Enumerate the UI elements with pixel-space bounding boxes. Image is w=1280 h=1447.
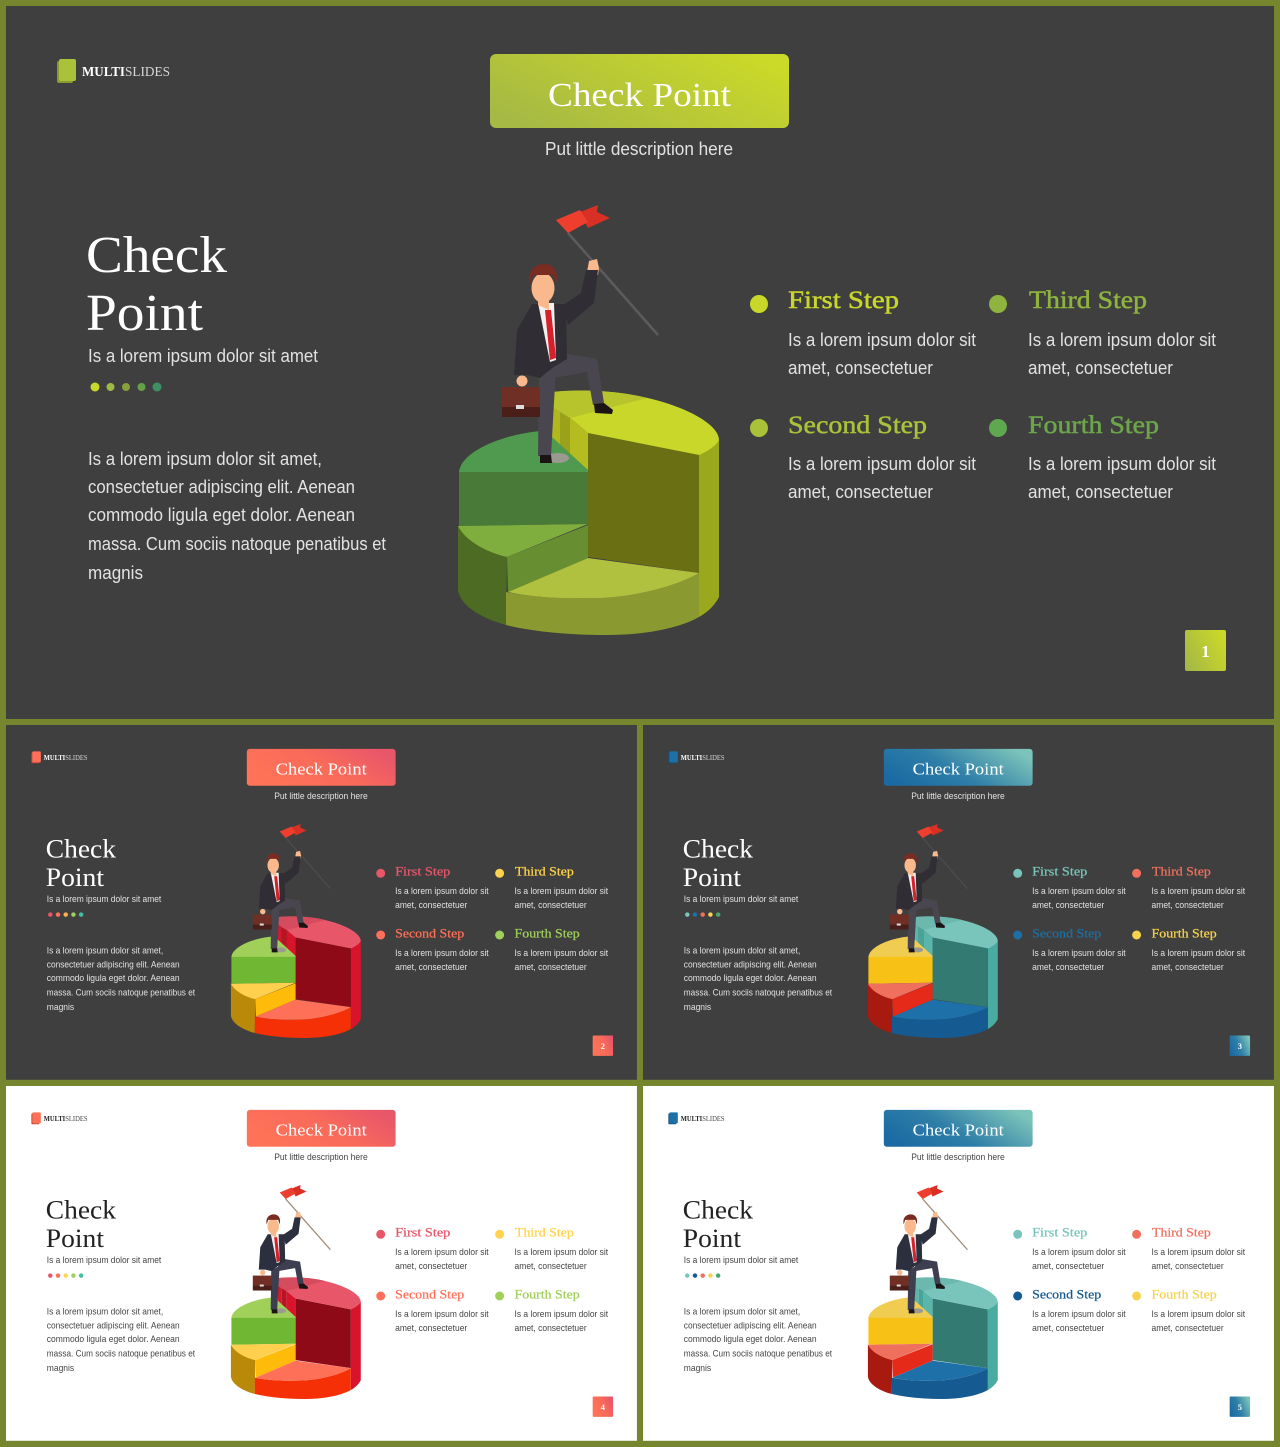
step: Second Step: Is a lorem ipsum dolor sit [1032, 948, 1126, 958]
left heading [683, 1195, 753, 1253]
figure: businessman with flag [253, 824, 330, 952]
left paragraph: consectetuer adipiscing elit. Aenean [88, 477, 355, 497]
step: Fourth Step: Is a lorem ipsum dolor sit [1028, 454, 1216, 474]
dot row [48, 1273, 83, 1278]
chart: 3D stepped pie [458, 391, 719, 635]
step: Third Step [495, 864, 609, 910]
step: First Step: First Step [788, 287, 899, 314]
figure: businessman with flag [502, 205, 658, 463]
step: First Step: Is a lorem ipsum dolor sit [1032, 1247, 1126, 1257]
step: Fourth Step: amet, consectetuer [1028, 482, 1173, 502]
left paragraph: magnis [684, 1363, 712, 1373]
step: Third Step: Third Step [1029, 287, 1147, 314]
logo: SLIDES [125, 65, 170, 80]
step: First Step [376, 864, 489, 910]
subtitle: Put little description here [911, 791, 1005, 801]
step: Second Step [376, 926, 489, 972]
dot row [90, 382, 162, 392]
step: Fourth Step: Fourth Step [1028, 412, 1159, 439]
step: Fourth Step: amet, consectetuer [515, 1323, 587, 1333]
chart: 3D stepped pie [868, 916, 998, 1038]
figure: businessman with flag [253, 1185, 330, 1313]
step: Second Step: amet, consectetuer [1032, 962, 1104, 972]
left paragraph: Is a lorem ipsum dolor sit amet, [47, 1306, 163, 1316]
logo: MULTI [82, 65, 125, 80]
page number [593, 1035, 613, 1056]
page number: 4 [601, 1402, 606, 1412]
logo: SLIDES [65, 754, 88, 762]
logo [668, 751, 725, 763]
dot row [685, 1273, 720, 1278]
step: First Step: Is a lorem ipsum dolor sit [395, 886, 489, 896]
step: First Step: amet, consectetuer [788, 358, 933, 378]
page number [1185, 630, 1226, 671]
step: Second Step: amet, consectetuer [395, 962, 467, 972]
left paragraph [684, 1306, 833, 1373]
left paragraph [47, 945, 196, 1012]
left paragraph [47, 1306, 196, 1373]
step: First Step: amet, consectetuer [1032, 900, 1104, 910]
left heading: Check [683, 1195, 753, 1224]
page number [1230, 1396, 1250, 1417]
left paragraph: Is a lorem ipsum dolor sit amet, [684, 945, 800, 955]
logo: SLIDES [702, 754, 725, 762]
chart: 3D stepped pie [868, 1277, 998, 1399]
step: Fourth Step [1132, 926, 1246, 972]
left paragraph: massa. Cum sociis natoque penatibus et [684, 1349, 833, 1359]
step: Third Step [989, 287, 1216, 378]
left paragraph: magnis [684, 1002, 712, 1012]
panel: large green slide [6, 6, 1274, 719]
step: First Step: amet, consectetuer [1032, 1261, 1104, 1271]
page number: 3 [1238, 1041, 1242, 1051]
step: Second Step: amet, consectetuer [1032, 1323, 1104, 1333]
step: Fourth Step [495, 926, 609, 972]
left subheading: Is a lorem ipsum dolor sit amet [47, 894, 162, 904]
step: First Step [750, 287, 976, 378]
step: Second Step [1013, 926, 1126, 972]
step: Fourth Step: Is a lorem ipsum dolor sit [1152, 1309, 1246, 1319]
step: Fourth Step: Fourth Step [515, 1287, 580, 1301]
step: First Step: Is a lorem ipsum dolor sit [1032, 886, 1126, 896]
step: Third Step [1132, 1225, 1246, 1271]
logo: SLIDES [702, 1115, 725, 1123]
step: Second Step: Is a lorem ipsum dolor sit [395, 948, 489, 958]
step: Fourth Step: Is a lorem ipsum dolor sit [515, 1309, 609, 1319]
step: Second Step [750, 412, 976, 502]
step: Third Step: amet, consectetuer [515, 1261, 587, 1271]
step: Third Step: Third Step [1152, 864, 1211, 878]
step: Third Step: amet, consectetuer [515, 900, 587, 910]
left paragraph: Is a lorem ipsum dolor sit amet, [47, 945, 163, 955]
logo: MULTI [681, 1115, 702, 1123]
title banner: Check Point [548, 77, 732, 114]
step: Third Step [1132, 864, 1246, 910]
title banner: Check Point [913, 760, 1004, 779]
step: Fourth Step: Fourth Step [515, 926, 580, 940]
step: Third Step: Third Step [515, 864, 574, 878]
step: First Step: First Step [1032, 864, 1087, 878]
left subheading: Is a lorem ipsum dolor sit amet [88, 346, 318, 366]
step: Fourth Step [989, 412, 1216, 502]
step: Third Step: Is a lorem ipsum dolor sit [515, 1247, 609, 1257]
left paragraph: commodo ligula eget dolor. Aenean [684, 973, 817, 983]
step: Third Step: Third Step [515, 1225, 574, 1239]
step: Third Step: amet, consectetuer [1028, 358, 1173, 378]
left paragraph: commodo ligula eget dolor. Aenean [88, 505, 355, 525]
subtitle: Put little description here [911, 1152, 1005, 1162]
step: First Step: First Step [395, 1225, 450, 1239]
title banner: Check Point [276, 760, 367, 779]
left heading: Point [683, 863, 742, 892]
left heading: Point [46, 863, 105, 892]
left paragraph: consectetuer adipiscing elit. Aenean [47, 1320, 180, 1330]
step: Fourth Step: Is a lorem ipsum dolor sit [1152, 948, 1246, 958]
step: Third Step [495, 1225, 609, 1271]
left paragraph: Is a lorem ipsum dolor sit amet, [684, 1306, 800, 1316]
left paragraph: commodo ligula eget dolor. Aenean [47, 1334, 180, 1344]
step: Fourth Step: amet, consectetuer [1152, 962, 1224, 972]
left paragraph: commodo ligula eget dolor. Aenean [47, 973, 180, 983]
left heading: Check [683, 834, 753, 863]
step: First Step: amet, consectetuer [395, 1261, 467, 1271]
page number [1230, 1035, 1250, 1056]
step: First Step: Is a lorem ipsum dolor sit [395, 1247, 489, 1257]
step: Second Step: Second Step [1032, 926, 1101, 940]
left heading [46, 834, 116, 892]
step: Third Step: Is a lorem ipsum dolor sit [515, 886, 609, 896]
step: Second Step: Is a lorem ipsum dolor sit [788, 454, 976, 474]
step: Third Step: amet, consectetuer [1152, 900, 1224, 910]
title banner [247, 749, 396, 786]
left heading: Point [46, 1224, 105, 1253]
step: Fourth Step [495, 1287, 609, 1333]
dot row [48, 912, 83, 917]
left paragraph: magnis [47, 1363, 75, 1373]
step: Second Step [376, 1287, 489, 1333]
step: Second Step: Second Step [1032, 1287, 1101, 1301]
step: First Step: amet, consectetuer [395, 900, 467, 910]
step: Second Step: amet, consectetuer [395, 1323, 467, 1333]
title banner [490, 54, 789, 128]
step: Third Step: Is a lorem ipsum dolor sit [1152, 886, 1246, 896]
left heading: Point [683, 1224, 742, 1253]
chart: 3D stepped pie [231, 1277, 361, 1399]
logo: MULTI [44, 754, 65, 762]
page number: 2 [601, 1041, 605, 1051]
step: Fourth Step: Fourth Step [1152, 926, 1217, 940]
panel: light blue slide [643, 1086, 1274, 1441]
step: Second Step: Second Step [788, 412, 927, 439]
dot row [685, 912, 720, 917]
step: Third Step: Is a lorem ipsum dolor sit [1152, 1247, 1246, 1257]
logo [31, 1112, 88, 1124]
step: First Step: First Step [395, 864, 450, 878]
step: Fourth Step [1132, 1287, 1246, 1333]
logo [57, 59, 170, 83]
left subheading: Is a lorem ipsum dolor sit amet [684, 1255, 799, 1265]
logo [668, 1112, 725, 1124]
left heading [683, 834, 753, 892]
left paragraph: consectetuer adipiscing elit. Aenean [47, 959, 180, 969]
step: Second Step [1013, 1287, 1126, 1333]
figure: businessman with flag [890, 1185, 967, 1313]
step: Fourth Step: Fourth Step [1152, 1287, 1217, 1301]
step: Third Step: Third Step [1152, 1225, 1211, 1239]
title banner [884, 749, 1033, 786]
step: Second Step: Is a lorem ipsum dolor sit [395, 1309, 489, 1319]
logo [31, 751, 88, 763]
title banner: Check Point [913, 1121, 1004, 1140]
subtitle: Put little description here [274, 1152, 368, 1162]
step: Fourth Step: Is a lorem ipsum dolor sit [515, 948, 609, 958]
step: Fourth Step: amet, consectetuer [1152, 1323, 1224, 1333]
page number [593, 1396, 613, 1417]
title banner [884, 1110, 1033, 1147]
title banner: Check Point [276, 1121, 367, 1140]
chart: 3D stepped pie [231, 916, 361, 1038]
left subheading: Is a lorem ipsum dolor sit amet [47, 1255, 162, 1265]
logo: MULTI [44, 1115, 65, 1123]
panel: light red slide [6, 1086, 637, 1441]
left paragraph: massa. Cum sociis natoque penatibus et [47, 1349, 196, 1359]
left paragraph: commodo ligula eget dolor. Aenean [684, 1334, 817, 1344]
left paragraph: consectetuer adipiscing elit. Aenean [684, 1320, 817, 1330]
step: First Step [376, 1225, 489, 1271]
left paragraph: massa. Cum sociis natoque penatibus et [684, 988, 833, 998]
step: Second Step: Second Step [395, 926, 464, 940]
panel: dark red slide [6, 725, 637, 1080]
left paragraph: magnis [88, 563, 143, 583]
left paragraph: Is a lorem ipsum dolor sit amet, [88, 449, 322, 469]
step: First Step: Is a lorem ipsum dolor sit [788, 330, 976, 350]
left paragraph: massa. Cum sociis natoque penatibus et [88, 534, 386, 554]
step: Fourth Step: amet, consectetuer [515, 962, 587, 972]
left paragraph: magnis [47, 1002, 75, 1012]
step: Third Step: Is a lorem ipsum dolor sit [1028, 330, 1216, 350]
page number: 5 [1238, 1402, 1242, 1412]
step: Second Step: Is a lorem ipsum dolor sit [1032, 1309, 1126, 1319]
logo: MULTI [681, 754, 702, 762]
page number: 1 [1201, 642, 1210, 661]
left heading: Point [86, 285, 204, 342]
subtitle: Put little description here [274, 791, 368, 801]
subtitle: Put little description here [545, 139, 733, 159]
left paragraph [88, 449, 386, 583]
step: First Step [1013, 864, 1126, 910]
left heading [46, 1195, 116, 1253]
step: Third Step: amet, consectetuer [1152, 1261, 1224, 1271]
step: Second Step: Second Step [395, 1287, 464, 1301]
step: First Step: First Step [1032, 1225, 1087, 1239]
figure: businessman with flag [890, 824, 967, 952]
logo: SLIDES [65, 1115, 88, 1123]
left paragraph [684, 945, 833, 1012]
step: Second Step: amet, consectetuer [788, 482, 933, 502]
panel: dark blue slide [643, 725, 1274, 1080]
step: First Step [1013, 1225, 1126, 1271]
left heading: Check [86, 227, 227, 284]
title banner [247, 1110, 396, 1147]
left subheading: Is a lorem ipsum dolor sit amet [684, 894, 799, 904]
left paragraph: massa. Cum sociis natoque penatibus et [47, 988, 196, 998]
left heading [86, 227, 227, 342]
left heading: Check [46, 1195, 116, 1224]
left paragraph: consectetuer adipiscing elit. Aenean [684, 959, 817, 969]
left heading: Check [46, 834, 116, 863]
